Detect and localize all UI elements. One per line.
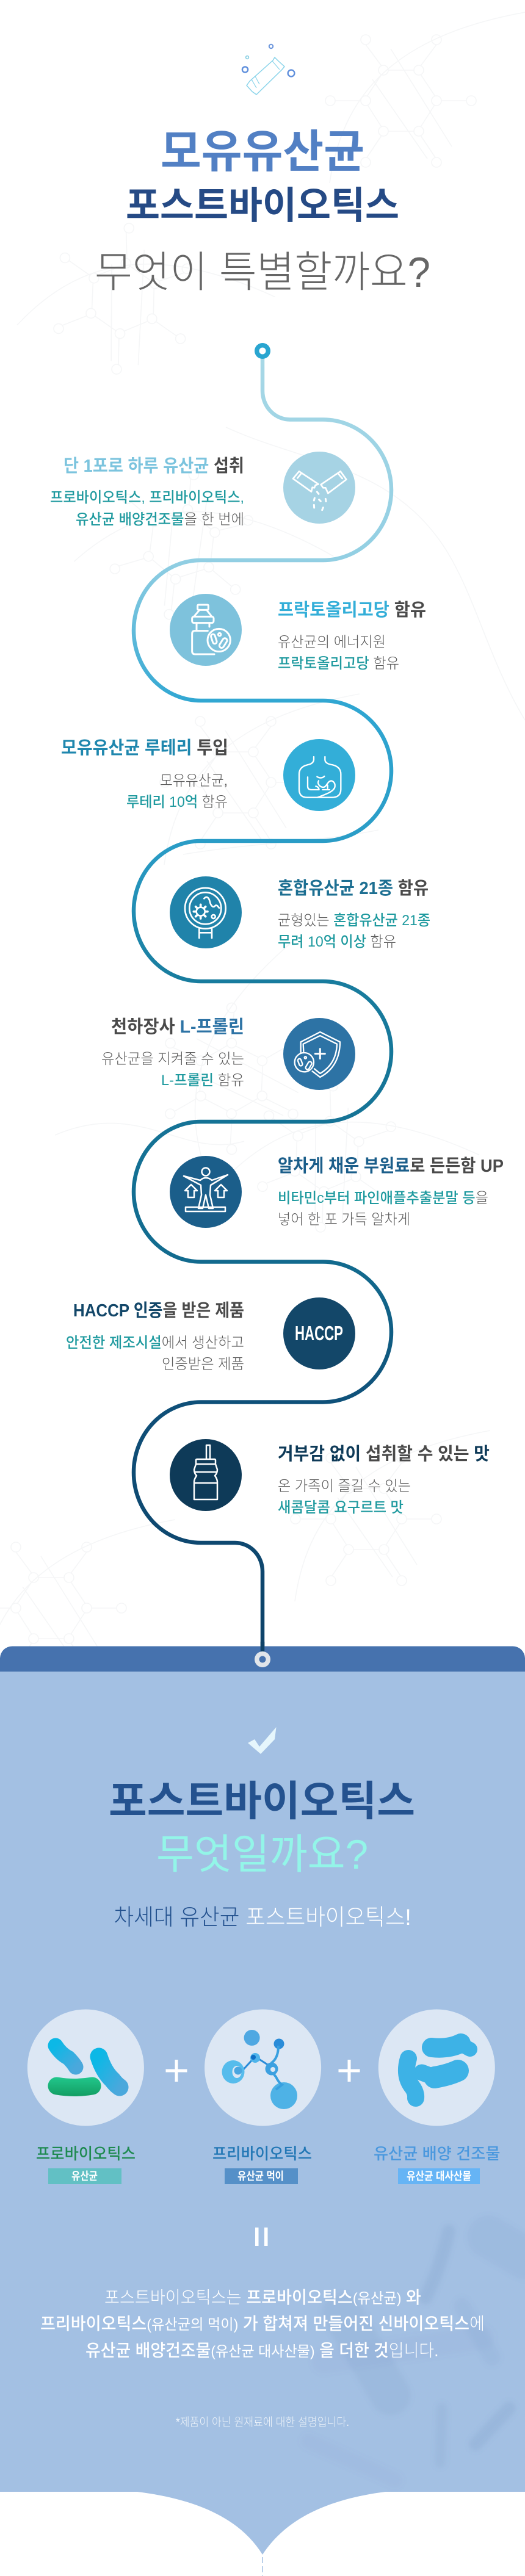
item 8: yogurt taste: 온 가족이 즐길 수 있는: [278, 1478, 411, 1495]
icon: shield with microbe: [283, 1018, 355, 1090]
item 8: yogurt taste: 새콤달콤 요구르트 맛: [278, 1499, 404, 1516]
explanation paragraph: 프리바이오틱스(유산균의 먹이) 가 합쳐져 만들어진 신바이오틱스에: [40, 2314, 485, 2333]
label: prebiotics: 유산균 먹이: [237, 2170, 284, 2182]
item 6: packed sub-ingredients: 비타민c부터 파인애플추출분말 등을: [278, 1190, 488, 1207]
item 7: HACCP certified: [66, 1301, 244, 1373]
explanation paragraph: 포스트바이오틱스는 프로바이오틱스(유산균) 와: [104, 2288, 421, 2307]
item 3: L. reuteri: 모유유산균 루테리 투입: [61, 738, 228, 758]
item 4: mixed probiotics: 균형있는 혼합유산균 21종: [278, 912, 430, 929]
icon: torn powder packets: [283, 452, 355, 524]
panel: what are postbiotics: [0, 1647, 525, 2555]
item 3: L. reuteri: 모유유산균,: [160, 773, 228, 789]
icon: plus: [338, 2060, 360, 2082]
icon: stick packet with bubbles: [242, 45, 294, 95]
item 8: yogurt taste: 거부감 없이 섭취할 수 있는 맛: [278, 1444, 490, 1464]
heading: postbiotics: 무엇일까요?: [156, 1831, 368, 1878]
illustration: culture dried material: [378, 2009, 495, 2126]
item 3: L. reuteri: 루테리 10억 함유: [126, 794, 228, 810]
item 3: L. reuteri: [61, 738, 228, 810]
item 7: HACCP certified: HACCP 인증을 받은 제품: [73, 1301, 244, 1321]
heading: postbiotics: [109, 1778, 415, 1878]
winding road line: [134, 351, 391, 1659]
item 6: packed sub-ingredients: 알차게 채운 부원료로 든든함 UP: [278, 1156, 504, 1176]
footnote: *제품이 아닌 원재료에 대한 설명입니다.: [176, 2415, 349, 2429]
item 7: HACCP certified: 인증받은 제품: [162, 1356, 244, 1373]
item 2: fructooligosaccharide: 프락토올리고당 함유: [278, 655, 399, 672]
label: prebiotics: [212, 2145, 312, 2184]
label: culture dried material: 유산균 대사산물: [407, 2170, 471, 2182]
start dot: [255, 343, 270, 359]
item 1: one packet a day: [50, 456, 244, 528]
explanation paragraph: 유산균 배양건조물(유산균 대사산물) 을 더한 것입니다.: [85, 2341, 439, 2360]
icon: yogurt bottle with straw: [170, 1439, 242, 1511]
icon: body figure with up arrows: [170, 1156, 242, 1228]
item 1: one packet a day: 프로바이오틱스, 프리바이오틱스,: [50, 489, 244, 506]
label: prebiotics: 프리바이오틱스: [212, 2145, 312, 2163]
item 2: fructooligosaccharide: 유산균의 에너지원: [278, 634, 386, 651]
icon: check mark: [248, 1727, 276, 1754]
end dot: [255, 1651, 270, 1667]
icon: bottle with microbes: [170, 594, 242, 666]
icon: microscope view petri dish: [170, 876, 242, 948]
background: faint DNA pattern: [0, 12, 525, 1690]
road vertical end cap: [261, 1642, 264, 1659]
item 6: packed sub-ingredients: 넣어 한 포 가득 알차게: [278, 1211, 410, 1228]
item 5: L-proline: [101, 1017, 244, 1089]
icon: vertical equals sign: [255, 2228, 267, 2246]
explanation paragraph: [40, 2288, 485, 2360]
title: 무엇이 특별할까요?: [95, 248, 430, 296]
label: probiotics: 유산균: [71, 2170, 98, 2182]
illustration: probiotics: [27, 2009, 144, 2126]
item 4: mixed probiotics: [278, 878, 430, 950]
heading: postbiotics: 포스트바이오틱스: [109, 1778, 415, 1825]
item 5: L-proline: 유산균을 지켜줄 수 있는: [101, 1051, 244, 1067]
title: 포스트바이오틱스: [126, 185, 399, 227]
label: culture dried material: [374, 2145, 501, 2184]
item 4: mixed probiotics: 혼합유산균 21종 함유: [278, 878, 429, 898]
item 5: L-proline: 천하장사 L-프롤린: [111, 1017, 244, 1037]
background: blurred bacteria: [308, 2231, 525, 2480]
label: probiotics: 프로바이오틱스: [36, 2145, 136, 2163]
subheading: 차세대 유산균 포스트바이오틱스!: [114, 1905, 411, 1930]
item 2: fructooligosaccharide: [278, 600, 426, 672]
icon: plus: [166, 2060, 187, 2082]
item 8: yogurt taste: [278, 1444, 490, 1516]
item 5: L-proline: L-프롤린 함유: [161, 1072, 244, 1089]
title: [95, 126, 430, 296]
item 6: packed sub-ingredients: [278, 1156, 504, 1228]
icon: HACCP badge: [283, 1297, 355, 1369]
label: probiotics: [36, 2145, 136, 2184]
item 7: HACCP certified: 안전한 제조시설에서 생산하고: [66, 1335, 244, 1351]
icon: HACCP badge: HACCP: [295, 1322, 343, 1344]
illustration: prebiotics: [205, 2009, 321, 2126]
item 1: one packet a day: 단 1포로 하루 유산균 섭취: [63, 456, 244, 476]
item 1: one packet a day: 유산균 배양건조물을 한 번에: [76, 511, 244, 528]
label: culture dried material: 유산균 배양 건조물: [374, 2145, 501, 2163]
item 4: mixed probiotics: 무려 10억 이상 함유: [278, 934, 396, 950]
title: 모유유산균: [161, 126, 364, 177]
road end band: [0, 1647, 525, 1672]
item 2: fructooligosaccharide: 프락토올리고당 함유: [278, 600, 426, 620]
dashed connector: [262, 2557, 263, 2576]
icon: stomach and intestine: [283, 739, 355, 811]
